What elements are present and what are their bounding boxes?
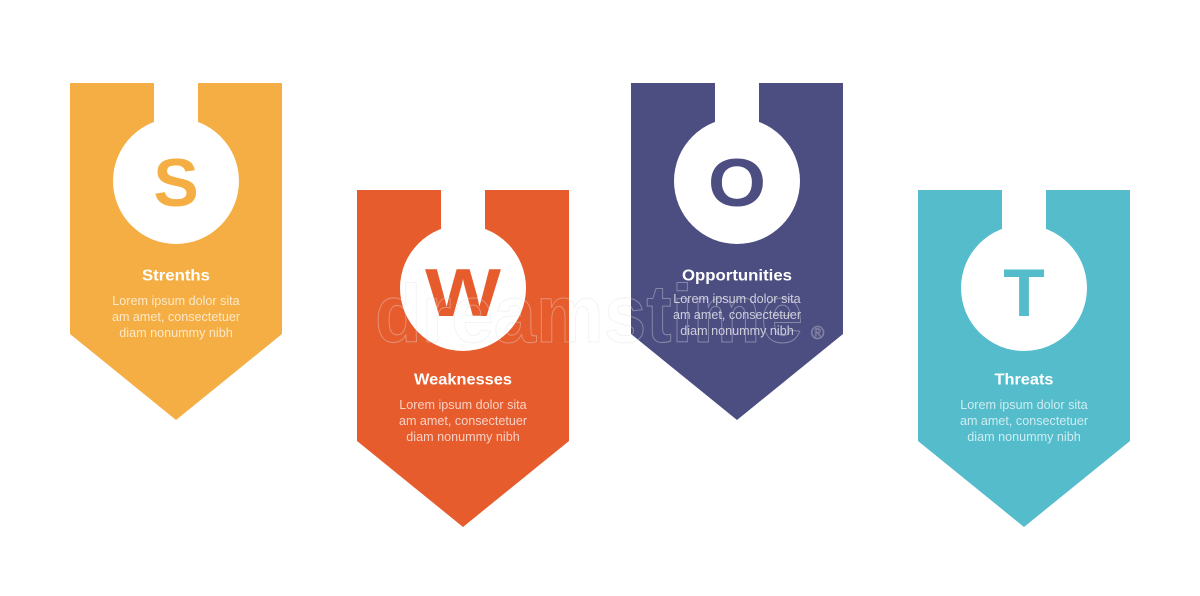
- text block: Weaknesses body: Lorem ipsum dolor sita: [399, 398, 527, 412]
- shape: orange arrow banner: [357, 190, 569, 527]
- text block: Threats body: diam nonummy nibh: [967, 430, 1081, 444]
- shape: indigo arrow banner: [631, 83, 843, 420]
- text block: Weaknesses body: [399, 398, 527, 444]
- icon: letter circle O: [674, 83, 800, 244]
- shape: teal arrow banner: [918, 190, 1130, 527]
- text block: Opportunities body: diam nonummy nibh: [680, 324, 794, 338]
- shape: yellow arrow banner: [70, 83, 282, 420]
- panel: Threats: [918, 190, 1130, 527]
- icon: letter circle W: W: [425, 255, 502, 331]
- heading: Opportunities: Opportunities: [682, 268, 792, 284]
- icon: letter circle O: O: [708, 145, 766, 221]
- heading: Strenths: Strenths: [142, 268, 210, 284]
- text block: Strengths body: am amet, consectetuer: [112, 310, 240, 324]
- text block: Weaknesses body: diam nonummy nibh: [406, 430, 520, 444]
- text block: Opportunities body: Lorem ipsum dolor sita: [673, 292, 801, 306]
- panel: Strengths: [70, 83, 282, 420]
- watermark: ®: [811, 323, 824, 343]
- watermark: dreamstime: [375, 269, 803, 360]
- icon: letter circle T: T: [1003, 255, 1045, 331]
- icon: letter circle W: [400, 190, 526, 351]
- text block: Threats body: [960, 398, 1088, 444]
- icon: letter circle S: [113, 83, 239, 244]
- text block: Opportunities body: [673, 292, 801, 338]
- icon: letter circle S: S: [153, 145, 199, 221]
- text block: Strengths body: Lorem ipsum dolor sita: [112, 294, 240, 308]
- text block: Opportunities body: am amet, consectetuer: [673, 308, 801, 322]
- text block: Strengths body: [112, 294, 240, 340]
- icon: letter circle T: [961, 190, 1087, 351]
- text block: Weaknesses body: am amet, consectetuer: [399, 414, 527, 428]
- text block: Threats body: Lorem ipsum dolor sita: [960, 398, 1088, 412]
- heading: Threats: Threats: [994, 372, 1054, 388]
- panel: Opportunities: [631, 83, 843, 420]
- text block: Strengths body: diam nonummy nibh: [119, 326, 233, 340]
- heading: Weaknesses: Weaknesses: [414, 372, 512, 388]
- panel: Weaknesses: [357, 190, 569, 527]
- text block: Threats body: am amet, consectetuer: [960, 414, 1088, 428]
